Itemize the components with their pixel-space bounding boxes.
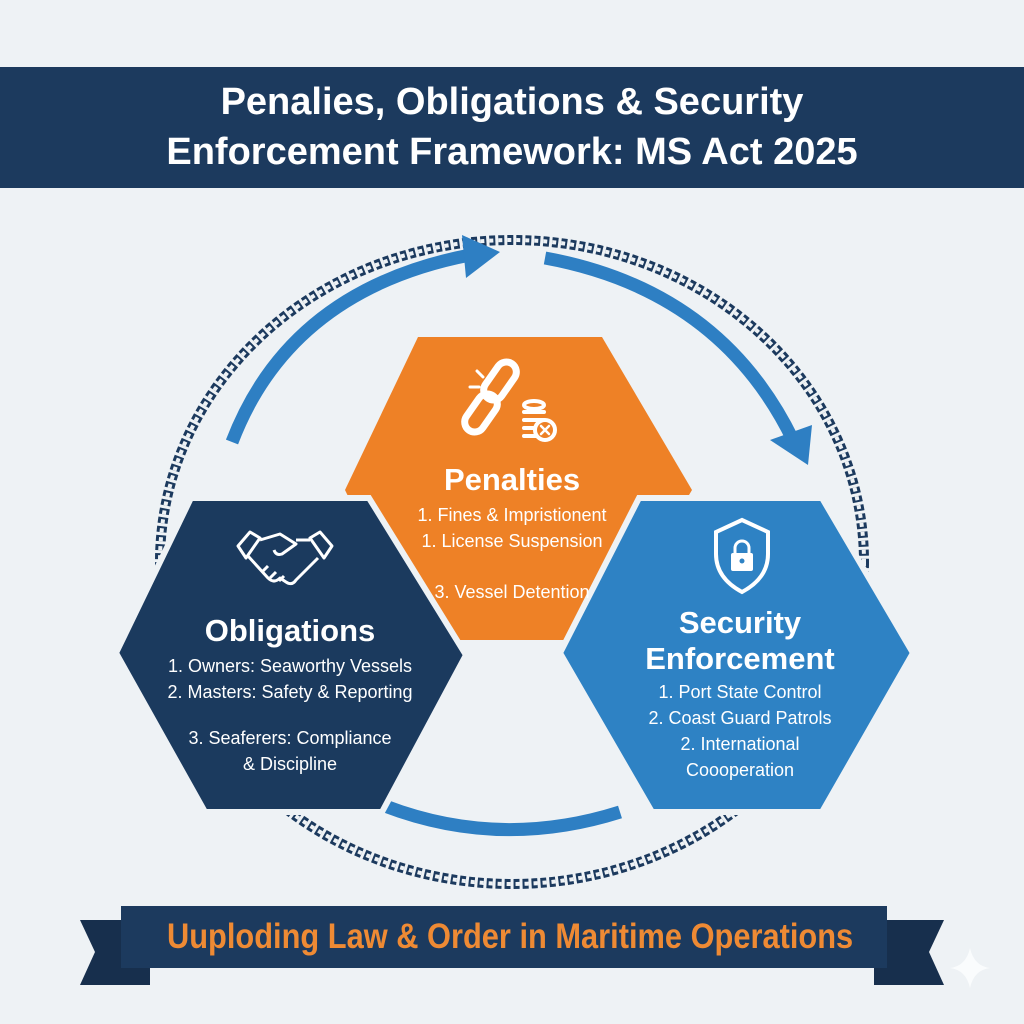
list: penalties (417, 505, 607, 602)
icon: broken chain and coins (461, 358, 555, 440)
list: obligations: 3. Seaferers: Compliance (188, 728, 392, 748)
bottom ribbon (80, 906, 944, 985)
icon: shield lock (716, 520, 768, 592)
list: security: Coooperation (686, 760, 794, 780)
heading: obligations: Obligations (205, 613, 375, 648)
title banner: Enforcement Framework: MS Act 2025 (166, 131, 858, 173)
list: security: 1. Port State Control (658, 682, 822, 702)
security text (645, 605, 835, 780)
heading: penalties: Penalties (444, 462, 580, 497)
list: security: 2. International (680, 734, 800, 754)
list: obligations: 2. Masters: Safety & Reporting (167, 682, 413, 702)
icon: sparkle (950, 948, 990, 988)
heading: security enforcement: Enforcement (645, 641, 835, 676)
ribbon text: Uuploding Law & Order in Maritime Operations (167, 917, 853, 956)
heading: security enforcement: Security (679, 605, 801, 640)
arrow: top to right (545, 258, 812, 465)
list: obligations: 1. Owners: Seaworthy Vessels (168, 656, 412, 676)
arrow: bottom (385, 806, 620, 830)
list: penalties: 3. Vessel Detention (434, 582, 590, 602)
arrow: left to top (232, 235, 500, 442)
list: security: 2. Coast Guard Patrols (648, 708, 832, 728)
panel: security enforcement (560, 498, 913, 812)
icon: handshake (238, 532, 332, 584)
list: obligations (167, 656, 413, 774)
list: penalties: 1. License Suspension (421, 531, 603, 551)
heading: security enforcement (645, 605, 835, 676)
obligations text (167, 613, 413, 774)
list: penalties: 1. Fines & Impristionent (417, 505, 607, 525)
penalties text (417, 462, 607, 602)
list: obligations: & Discipline (243, 754, 337, 774)
panel: penalties (345, 337, 692, 640)
list: security (648, 682, 832, 780)
panel: obligations (116, 498, 466, 812)
title banner: Penalies, Obligations & Security (221, 81, 803, 123)
title banner (0, 67, 1024, 188)
rope circle (160, 240, 864, 884)
